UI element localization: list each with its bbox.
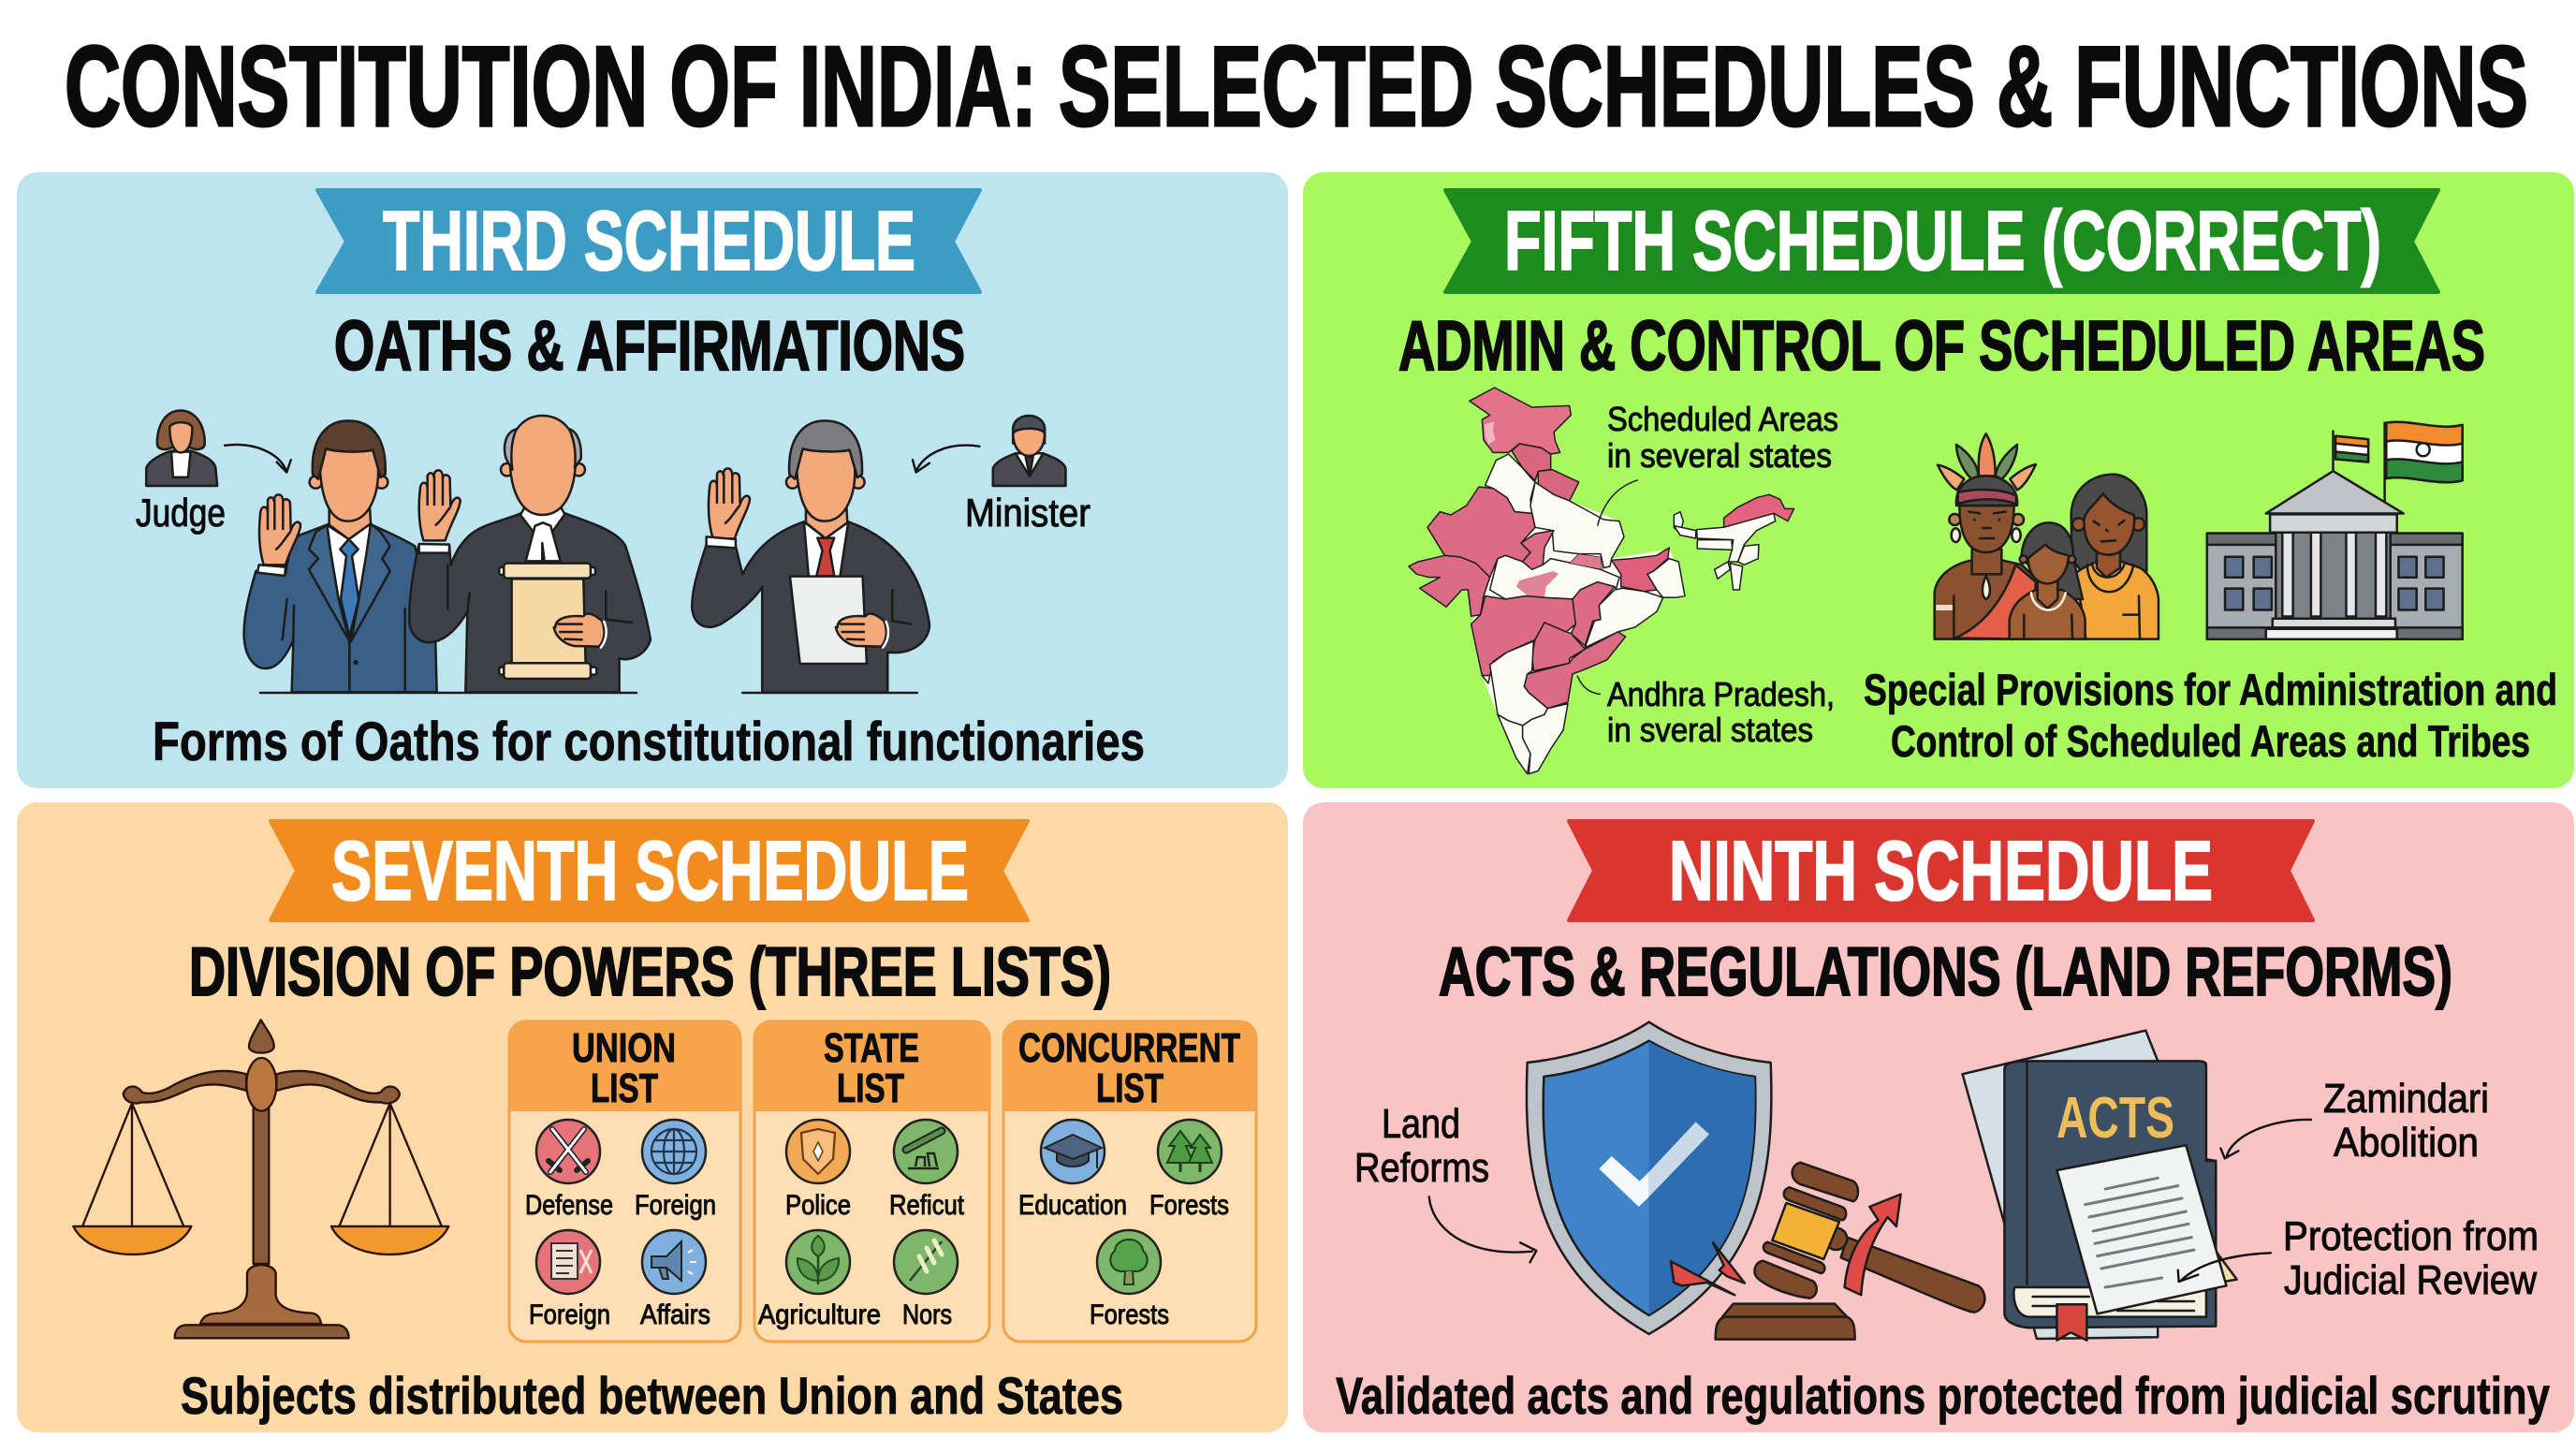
illustration: tribal family	[1935, 433, 2159, 639]
caption: special provisions	[1864, 665, 2557, 766]
ground lines	[260, 689, 917, 697]
icon: small judge	[146, 410, 217, 486]
figure: judge in robe with scroll	[409, 416, 651, 692]
icon: gavel	[1716, 1163, 1984, 1340]
icon: foreign globe	[642, 1120, 706, 1183]
icon: shield	[1527, 1022, 1771, 1334]
label: land reforms: Land	[1382, 1101, 1460, 1147]
header: union list: LIST	[591, 1065, 658, 1111]
icon: forests pines	[1158, 1120, 1222, 1183]
card: union list	[509, 1021, 740, 1342]
icon: education cap	[1041, 1120, 1105, 1183]
caption: forms of oaths: Forms of Oaths for constitutional functionaries	[153, 712, 1145, 772]
arrow: judge to figure	[225, 445, 291, 472]
icon: forests tree	[1097, 1230, 1161, 1294]
label: andhra pradesh	[1607, 675, 1835, 749]
label: andhra pradesh: Andhra Pradesh,	[1607, 675, 1835, 713]
label: land reforms: Reforms	[1354, 1145, 1489, 1191]
header: union list	[572, 1025, 676, 1111]
panel: third schedule	[17, 172, 1288, 788]
ribbon: ninth schedule: NINTH SCHEDULE	[1669, 825, 2213, 918]
header: state list: LIST	[837, 1065, 904, 1111]
label: reficut: Reficut	[889, 1190, 965, 1221]
label: forests: Forests	[1149, 1190, 1229, 1221]
figure: man in blue suit	[244, 420, 437, 692]
label: education: Education	[1018, 1190, 1127, 1221]
arrow: zamindari to book	[2220, 1120, 2311, 1158]
icon: red arrows	[1671, 1195, 1901, 1295]
illustration: oath takers	[244, 416, 929, 693]
arrow: minister to figure	[913, 446, 979, 472]
label: agriculture: Agriculture	[758, 1299, 881, 1330]
panel: fifth schedule	[1303, 172, 2574, 788]
label: police: Police	[785, 1190, 851, 1221]
card: state list	[754, 1021, 989, 1342]
illustration: book and arrows	[1429, 1031, 2311, 1341]
label: scheduled areas: in several states	[1607, 436, 1832, 475]
illustration: shield and gavel	[1527, 1022, 1984, 1340]
ribbon: third schedule: THIRD SCHEDULE	[383, 195, 915, 288]
label: foreign: Foreign	[635, 1190, 716, 1221]
header: concurrent list	[1018, 1025, 1240, 1111]
header: concurrent list: CONCURRENT	[1018, 1025, 1240, 1071]
caption: subjects distributed: Subjects distributed between Union and States	[181, 1366, 1123, 1425]
icon: defense swords	[536, 1120, 600, 1183]
panel: seventh schedule	[17, 802, 1288, 1432]
label: defense: Defense	[525, 1190, 613, 1221]
icon: small minister	[993, 416, 1065, 486]
label: protection from judicial review: Protection from	[2283, 1213, 2539, 1259]
icon: foreign document	[536, 1230, 600, 1294]
header: union list: UNION	[572, 1025, 676, 1071]
header: state list: STATE	[824, 1025, 919, 1071]
label: zamindari abolition: Zamindari	[2323, 1076, 2489, 1122]
icon: acts book	[1963, 1031, 2237, 1341]
icon: affairs megaphone	[642, 1230, 706, 1294]
icon: reficut machine	[894, 1120, 958, 1183]
arrow: land reforms to shield	[1429, 1196, 1536, 1262]
header: concurrent list: LIST	[1096, 1065, 1164, 1111]
label: andhra pradesh: in sveral states	[1607, 711, 1813, 749]
label: nors: Nors	[902, 1299, 952, 1330]
panel: ninth schedule	[1303, 802, 2574, 1432]
arrow: protection to document	[2178, 1253, 2271, 1282]
icon: nors wheat	[894, 1230, 958, 1294]
label: land reforms	[1354, 1101, 1489, 1191]
book title: ACTS: ACTS	[2056, 1086, 2174, 1151]
heading: division of powers: DIVISION OF POWERS (THREE LISTS)	[189, 934, 1111, 1010]
label: zamindari abolition: Abolition	[2334, 1120, 2479, 1166]
heading: oaths and affirmations: OATHS & AFFIRMATIONS	[334, 306, 965, 385]
illustration: government building with flags	[2207, 422, 2463, 639]
label: affairs: Affairs	[640, 1299, 710, 1330]
label: minister: Minister	[965, 491, 1090, 535]
figure: minister in suit with paper	[692, 420, 929, 693]
icon: agriculture plant	[786, 1230, 850, 1294]
label: protection from judicial review	[2283, 1213, 2539, 1303]
card: concurrent list	[1003, 1021, 1256, 1342]
header: state list	[824, 1025, 919, 1111]
ribbon: third schedule	[317, 190, 980, 292]
icon: police badge	[786, 1120, 850, 1183]
label: zamindari abolition	[2323, 1076, 2489, 1166]
label: scheduled areas	[1607, 400, 1838, 475]
label: scheduled areas: Scheduled Areas	[1607, 400, 1838, 438]
label: judge: Judge	[136, 491, 226, 535]
map of India	[1409, 388, 1794, 774]
label: forests second: Forests	[1090, 1299, 1169, 1330]
label: protection from judicial review: Judicial Review	[2284, 1257, 2537, 1303]
ribbon: seventh schedule: SEVENTH SCHEDULE	[331, 825, 969, 918]
illustration: small figures and arrows	[146, 410, 1065, 486]
label: foreign second: Foreign	[529, 1299, 610, 1330]
icon: balance scales	[73, 1020, 448, 1338]
